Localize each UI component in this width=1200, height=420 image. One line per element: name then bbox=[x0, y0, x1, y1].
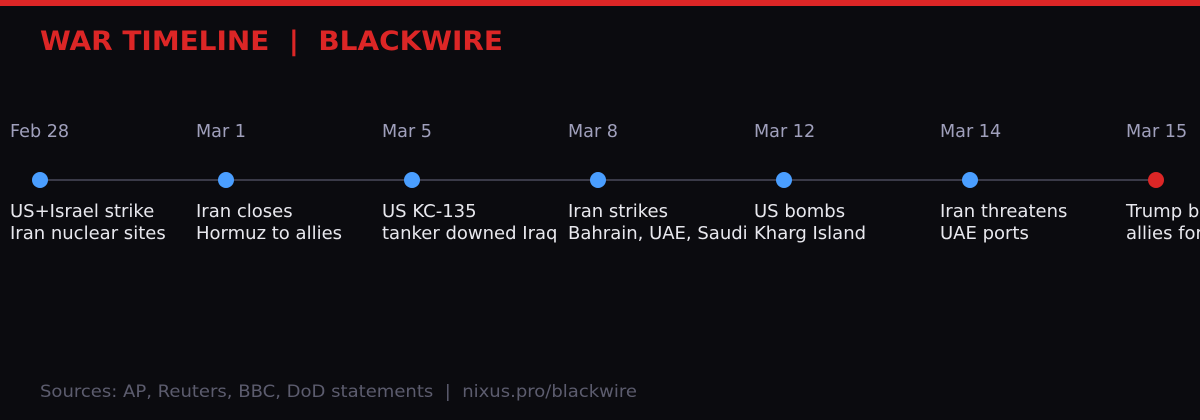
event: Feb 28: Iran nuclear sites bbox=[10, 223, 166, 244]
event: Mar 1 bbox=[196, 122, 342, 244]
event: Mar 12: US bombs bbox=[754, 201, 845, 222]
event: Mar 5: US KC-135 bbox=[382, 201, 477, 222]
event: Feb 28: Feb 28 bbox=[10, 122, 69, 142]
timeline events bbox=[10, 122, 1200, 244]
top red bar bbox=[0, 0, 1200, 6]
event: Mar 5: Mar 5 bbox=[382, 122, 432, 142]
footer sources: Sources: AP, Reuters, BBC, DoD statements | nixus.pro/blackwire bbox=[40, 382, 637, 402]
event: Mar 1: Hormuz to allies bbox=[196, 223, 342, 244]
event: Mar 1: Iran closes bbox=[196, 201, 293, 222]
event: Mar 12 bbox=[754, 122, 866, 244]
event: Mar 15 bbox=[1125, 122, 1200, 244]
event: Mar 8: Bahrain, UAE, Saudi bbox=[568, 223, 748, 244]
event: Mar 14: Iran threatens bbox=[940, 201, 1067, 222]
event: Mar 14 bbox=[940, 122, 1067, 244]
event: Feb 28 bbox=[10, 122, 166, 244]
event: Mar 12: Kharg Island bbox=[754, 223, 866, 244]
event: Mar 12: Mar 12 bbox=[754, 122, 815, 142]
event: Mar 14: Mar 14 bbox=[940, 122, 1001, 142]
title: WAR TIMELINE | BLACKWIRE bbox=[40, 26, 503, 57]
event: Feb 28: US+Israel strike bbox=[10, 201, 154, 222]
event: Mar 15: Mar 15 bbox=[1126, 122, 1187, 142]
event: Mar 5 bbox=[382, 122, 557, 244]
event: Mar 5: tanker downed Iraq bbox=[382, 223, 557, 244]
event: Mar 1: Mar 1 bbox=[196, 122, 246, 142]
event: Mar 8 bbox=[568, 122, 748, 244]
timeline line bbox=[40, 179, 1156, 181]
event: Mar 8: Iran strikes bbox=[568, 201, 668, 222]
event: Mar 8: Mar 8 bbox=[568, 122, 618, 142]
event: Mar 14: UAE ports bbox=[940, 223, 1029, 244]
